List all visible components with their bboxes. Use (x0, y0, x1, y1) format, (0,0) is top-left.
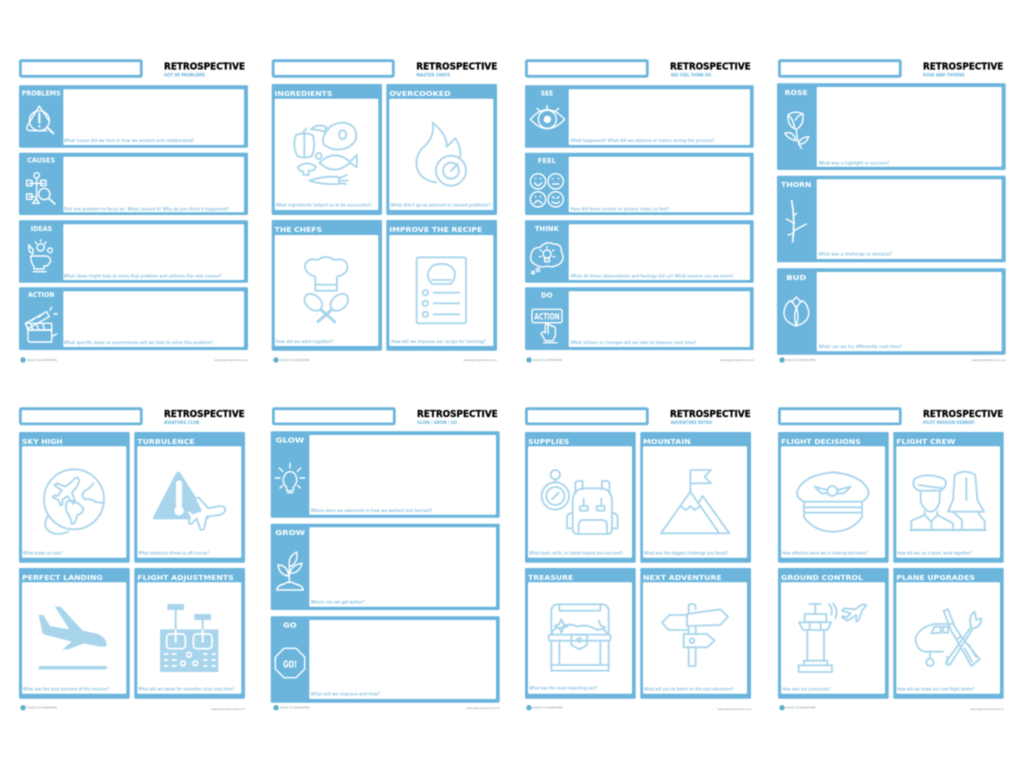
panel: causes (19, 153, 248, 215)
panel: sky high: What made us soar? (23, 550, 63, 556)
name box (20, 61, 141, 76)
name box (273, 61, 393, 76)
panel: next adventure (640, 568, 751, 699)
footer url: www.agileclassrooms.com (972, 358, 1006, 362)
panel: see: SEE (541, 89, 553, 98)
panel: treasure: TREASURE (528, 573, 573, 582)
panel: action (19, 287, 248, 350)
panel: glow (271, 431, 500, 518)
panel: causes: Pick one problem to focus on. What caused it? Why do you think it happened? (64, 206, 229, 212)
panel: causes: CAUSES (27, 156, 55, 164)
footer url: www.agileclassrooms.com (720, 358, 754, 362)
panel: action: ACTION (28, 290, 54, 299)
subtitle: AVIATORS CLUB (164, 420, 199, 425)
footer logo: AGILE CLASSROOMS (27, 706, 57, 710)
footer logo: AGILE CLASSROOMS (532, 358, 563, 362)
panel: go: GO! (283, 659, 297, 670)
subtitle: MASTER CHEFS (416, 72, 450, 77)
panel: action: What specific steps or experiments will we take to solve this problem? (64, 340, 213, 346)
subtitle: SEE FEEL THINK DO (671, 72, 712, 77)
sheet: see feel think do (525, 61, 754, 363)
panel: overcooked (386, 84, 497, 215)
sheet: aviators club (19, 409, 245, 711)
panel: go: What will we improve and how? (311, 692, 380, 698)
title: RETROSPECTIVE (923, 409, 1003, 420)
footer url: www.agileclassrooms.com (214, 358, 248, 362)
panel: next adventure: What will you do better on the next adventure? (644, 686, 734, 692)
name box (779, 61, 900, 76)
footer logo (273, 705, 310, 710)
panel: see (525, 85, 754, 148)
footer logo: AGILE CLASSROOMS (786, 706, 816, 710)
subtitle: ROSE AND THORNS (923, 72, 965, 77)
panel: ideas: What ideas might help to solve that problem and address the root causes? (64, 273, 221, 279)
panel: ideas (19, 220, 248, 283)
panel: do (525, 287, 754, 350)
footer url: www.agileclassrooms.com (463, 358, 497, 362)
title: RETROSPECTIVE (417, 409, 498, 420)
name box (20, 409, 141, 424)
panel: feel: How did those events or actions make us feel? (571, 206, 669, 212)
panel: sky high (19, 432, 130, 563)
panel: rose (777, 83, 1006, 170)
sheet: pilot mission debrief (778, 409, 1004, 711)
panel: flight decisions: How effective were we in making decisions? (782, 550, 868, 556)
panel: problems: What issues did we face in how we worked and collaborated? (64, 138, 194, 144)
panel: ground control (778, 568, 889, 699)
footer url: www.agileclassrooms.com (970, 707, 1004, 711)
panel: do: DO (541, 291, 553, 300)
panel: grow: Where can we get better? (311, 599, 365, 605)
footer logo (273, 357, 310, 363)
panel: grow: GROW (275, 528, 305, 537)
panel: do: What actions or changes will we take to improve next time? (571, 340, 696, 346)
title: RETROSPECTIVE (164, 61, 245, 72)
panel: mountain: What was the biggest challenge you faced? (644, 550, 728, 556)
panel: glow: GLOW (276, 436, 304, 444)
panel: bud (777, 268, 1006, 355)
sheet: master chefs (272, 61, 497, 363)
title: RETROSPECTIVE (670, 61, 751, 72)
footer logo: AGILE CLASSROOMS (27, 358, 57, 362)
panel: feel: FEEL (538, 156, 556, 165)
panel: flight decisions (778, 432, 889, 563)
panel: grow (271, 524, 500, 610)
footer url: www.agileclassrooms.com (466, 706, 500, 710)
panel: go (271, 616, 500, 703)
panel: ingredients: What ingredients helped us to be successful? (276, 203, 371, 209)
panel: turbulence: What obstacles threw us off course? (138, 550, 209, 556)
panel: perfect landing: What was the best outcome of this mission? (23, 686, 109, 692)
panel: glow: Where were we awesome in how we worked and learned? (311, 508, 432, 514)
panel: turbulence (134, 432, 245, 563)
panel: perfect landing (19, 568, 130, 699)
panel: think: THINK (535, 224, 559, 233)
footer logo (779, 357, 816, 363)
panel: flight adjustments (134, 568, 245, 699)
panel: rose: What was a highlight or success? (819, 160, 889, 166)
panel: thorn: THORN (781, 180, 811, 189)
sheet: rose and thorns (777, 61, 1006, 363)
panel: bud: BUD (786, 273, 806, 282)
panel: plane upgrades (893, 568, 1004, 699)
panel: flight decisions: FLIGHT DECISIONS (781, 437, 861, 446)
panel: do: ACTION (534, 312, 560, 322)
panel: turbulence: TURBULENCE (137, 437, 195, 446)
name box (526, 61, 647, 76)
panel: sky high: SKY HIGH (22, 437, 63, 446)
panel: improve the recipe: IMPROVE THE RECIPE (389, 225, 482, 234)
name box (779, 409, 900, 424)
panel: supplies: SUPPLIES (528, 437, 569, 446)
panel: ground control: How was our processes? (782, 686, 831, 692)
footer logo: AGILE CLASSROOMS (786, 358, 816, 362)
name box (526, 409, 647, 424)
panel: flight crew: FLIGHT CREW (896, 437, 955, 446)
panel: ingredients (272, 84, 382, 215)
subtitle: ADVENTURE RETRO (671, 420, 713, 425)
footer logo: AGILE CLASSROOMS (532, 706, 563, 710)
panel: problems: PROBLEMS (22, 88, 61, 98)
title: RETROSPECTIVE (164, 409, 245, 420)
footer url: www.agileclassrooms.com (717, 707, 751, 711)
panel: plane upgrades: How will we make our next flight better? (897, 686, 975, 692)
title: RETROSPECTIVE (923, 61, 1003, 72)
footer logo (779, 705, 816, 710)
panel: treasure: What was the most rewarding part? (529, 686, 598, 692)
subtitle: GLOW | GROW | GO (417, 420, 457, 425)
footer logo: AGILE CLASSROOMS (280, 706, 310, 710)
panel: ingredients: INGREDIENTS (275, 89, 332, 98)
panel: plane upgrades: PLANE UPGRADES (896, 573, 975, 582)
subtitle: GOT 99 PROBLEMS (164, 72, 205, 77)
panel: feel (525, 153, 754, 215)
name box (273, 409, 394, 424)
panel: flight crew (893, 432, 1004, 563)
panel: the chefs (272, 220, 382, 351)
panel: overcooked: What didn't go as planned or caused problems? (391, 203, 491, 209)
title: RETROSPECTIVE (416, 61, 497, 72)
panel: go: GO (283, 620, 297, 630)
panel: perfect landing: PERFECT LANDING (22, 573, 103, 582)
panel: improve the recipe: How will we improve our recipe for learning? (391, 339, 486, 345)
panel: ground control: GROUND CONTROL (781, 573, 863, 582)
panel: ideas: IDEAS (31, 224, 52, 233)
footer logo (526, 705, 563, 710)
panel: flight adjustments: FLIGHT ADJUSTMENTS (137, 573, 234, 582)
sheet: glow grow go (271, 409, 500, 710)
title: RETROSPECTIVE (670, 409, 751, 420)
panel: thorn (777, 176, 1006, 262)
panel: mountain: MOUNTAIN (643, 437, 691, 446)
panel: see: What happened? What did we observe or notice during the process? (571, 138, 714, 144)
panel: bud: What can we try differently next time? (819, 344, 902, 350)
footer url: www.agileclassrooms.com (211, 707, 245, 711)
sheet: adventure retro (525, 409, 751, 711)
panel: treasure (525, 568, 636, 699)
footer logo (20, 705, 57, 710)
panel: overcooked: OVERCOOKED (389, 89, 451, 98)
panel: think: What do these observations and feelings tell us? What lessons can we learn? (571, 273, 733, 279)
footer logo: AGILE CLASSROOMS (280, 358, 310, 362)
panel: supplies: What tools, skills, or habits helped you succeed? (529, 550, 623, 556)
panel: problems (19, 85, 248, 148)
footer logo (526, 357, 563, 363)
panel: mountain (640, 432, 751, 563)
footer logo (20, 357, 57, 363)
panel: supplies (525, 432, 636, 563)
panel: thorn: What was a challenge or obstacle? (819, 251, 892, 257)
panel: next adventure: NEXT ADVENTURE (643, 573, 722, 582)
sheet: got 99 problems (19, 61, 248, 363)
panel: rose: ROSE (785, 88, 808, 97)
panel: think (525, 220, 754, 283)
panel: the chefs: THE CHEFS (275, 225, 322, 234)
subtitle: PILOT MISSION DEBRIEF (923, 420, 975, 425)
panel: flight crew: How did we, as a team, work together? (897, 550, 972, 556)
panel: improve the recipe (386, 220, 497, 351)
panel: the chefs: How did we work together? (276, 339, 333, 345)
panel: flight adjustments: What will we tweak for smoother skies next time? (138, 686, 234, 692)
